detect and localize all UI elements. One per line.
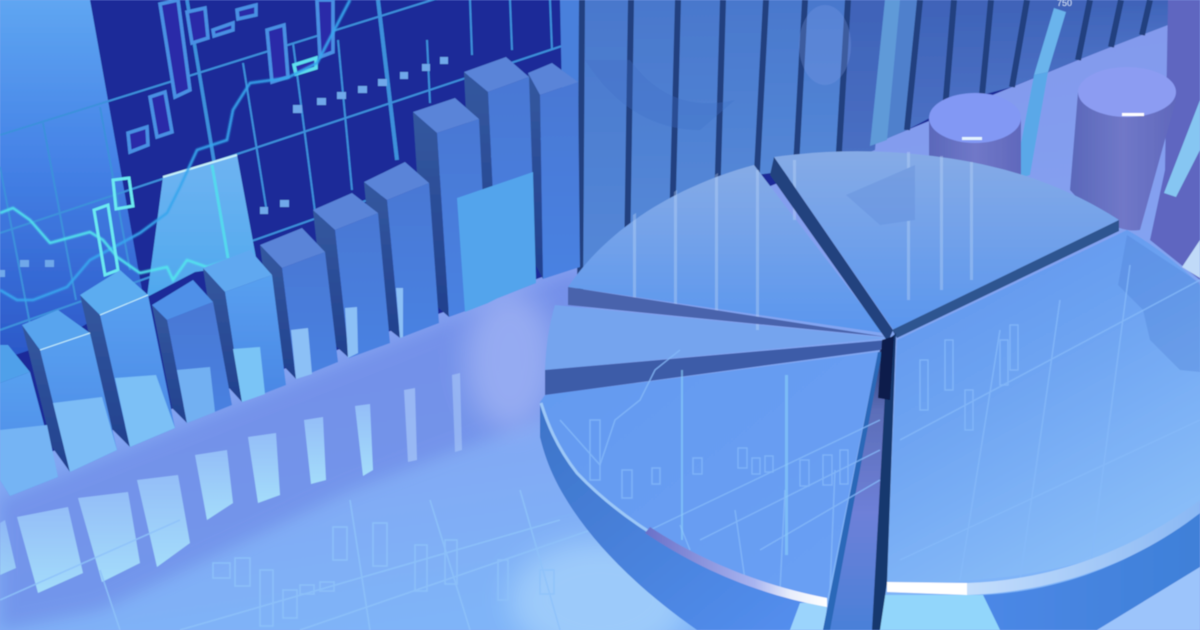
bar 2 bbox=[22, 310, 117, 472]
pie side wall: left bbox=[540, 400, 827, 630]
price trend line bbox=[0, 0, 350, 300]
cylinder: large bbox=[1070, 67, 1176, 230]
back wall with trading screen bbox=[0, 0, 1200, 470]
pale floor corner bbox=[1097, 567, 1200, 630]
pie chart bbox=[540, 151, 1200, 630]
candlesticks bbox=[128, 0, 333, 152]
bar 1 bbox=[0, 345, 58, 496]
bar 3 bbox=[80, 270, 175, 447]
reflections in upper slices bbox=[633, 152, 973, 330]
white rim right bbox=[887, 582, 967, 595]
cyan panel bbox=[147, 155, 257, 297]
slice: right bbox=[887, 230, 1200, 582]
cyan floor patch bbox=[878, 595, 1000, 630]
central wedge gap bbox=[823, 337, 893, 630]
bar 4 bbox=[152, 280, 232, 423]
floor reflections of the bars bbox=[0, 373, 462, 593]
dash markers bbox=[0, 57, 448, 277]
dark separators bbox=[580, 0, 1150, 300]
bar 11 bbox=[528, 63, 580, 279]
pie side wall: right bbox=[983, 513, 1200, 630]
pie reflection: vertical streaks bbox=[681, 370, 788, 555]
bar 6 bbox=[260, 228, 338, 379]
light column bbox=[870, 0, 920, 146]
glass edge highlight bbox=[541, 403, 648, 531]
slice divider walls bbox=[770, 157, 893, 342]
dark reflection band under bars bbox=[0, 270, 590, 630]
reflected circle on tall bars bbox=[799, 5, 851, 85]
right slice reflection bbox=[1118, 235, 1200, 372]
slice: upper left bbox=[568, 165, 883, 333]
tall bars behind pie bbox=[560, 0, 1172, 300]
floor patch under pie wedge bbox=[790, 603, 827, 630]
pie reflection: candlesticks bbox=[560, 265, 1200, 590]
bar 9 bbox=[413, 98, 488, 317]
reflected arc on tall bars bbox=[585, 60, 735, 130]
cylinder: small bbox=[929, 93, 1021, 185]
bar 7 bbox=[313, 193, 390, 358]
bar chart: ascending 3D bars bbox=[0, 57, 580, 496]
small glowing bar with label bbox=[1014, 0, 1072, 180]
slice: small left bbox=[545, 305, 887, 370]
bar 10 bbox=[464, 57, 536, 298]
floor reflection: candlesticks and grid bbox=[0, 490, 620, 630]
tall pale panel bbox=[0, 0, 142, 360]
cyan block bbox=[457, 172, 536, 312]
highlighted candles on panel bbox=[94, 178, 133, 275]
slice: large lower left bbox=[540, 352, 878, 600]
wave line bbox=[0, 208, 240, 280]
soft light on floor beside pie bbox=[510, 540, 690, 630]
bar 5 bbox=[203, 250, 286, 402]
right edge wall bbox=[1150, 0, 1200, 280]
bar 8 bbox=[364, 162, 439, 338]
lavender rim left bbox=[645, 527, 827, 607]
screen grid lines bbox=[0, 0, 580, 340]
slice: top bbox=[774, 151, 1119, 332]
